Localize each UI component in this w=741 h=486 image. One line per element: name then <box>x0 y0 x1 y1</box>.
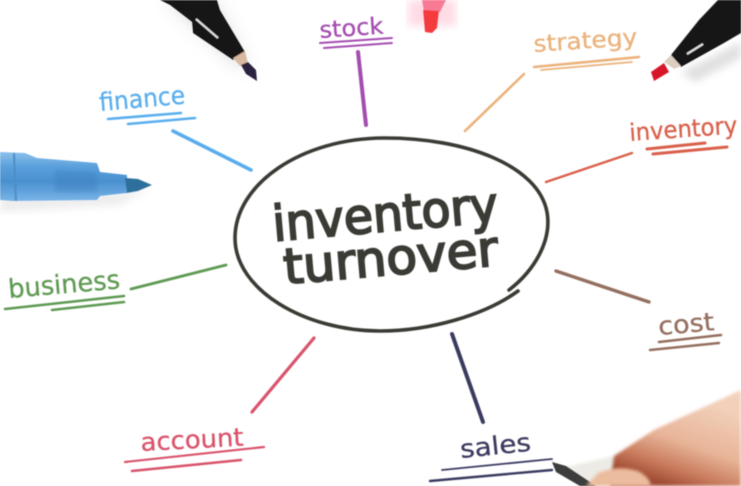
branch: inventory <box>546 112 738 182</box>
central title <box>270 176 501 296</box>
branch: business: business <box>7 265 121 305</box>
black marker, top left <box>160 0 257 81</box>
central title: turnover <box>281 220 501 296</box>
central oval <box>235 138 548 331</box>
branch: business <box>5 265 226 310</box>
branch: stock: stock <box>319 14 385 44</box>
branch: stock <box>319 14 392 125</box>
hand holding pen <box>552 390 741 486</box>
central title: inventory <box>270 176 500 253</box>
branch: strategy: strategy <box>533 25 638 58</box>
branch: sales <box>430 334 552 481</box>
branch: account <box>125 338 314 471</box>
branch: cost <box>556 271 721 350</box>
branch: finance <box>98 81 251 170</box>
branch: cost: cost <box>657 307 716 341</box>
pink marker, top <box>408 0 456 33</box>
branch: inventory: inventory <box>628 112 738 147</box>
branch: account: account <box>140 423 244 457</box>
branch: sales: sales <box>459 428 532 464</box>
blue marker, left <box>0 152 152 212</box>
branch: finance: finance <box>98 81 186 117</box>
branch: strategy <box>465 25 639 131</box>
black marker, top right <box>651 0 741 82</box>
